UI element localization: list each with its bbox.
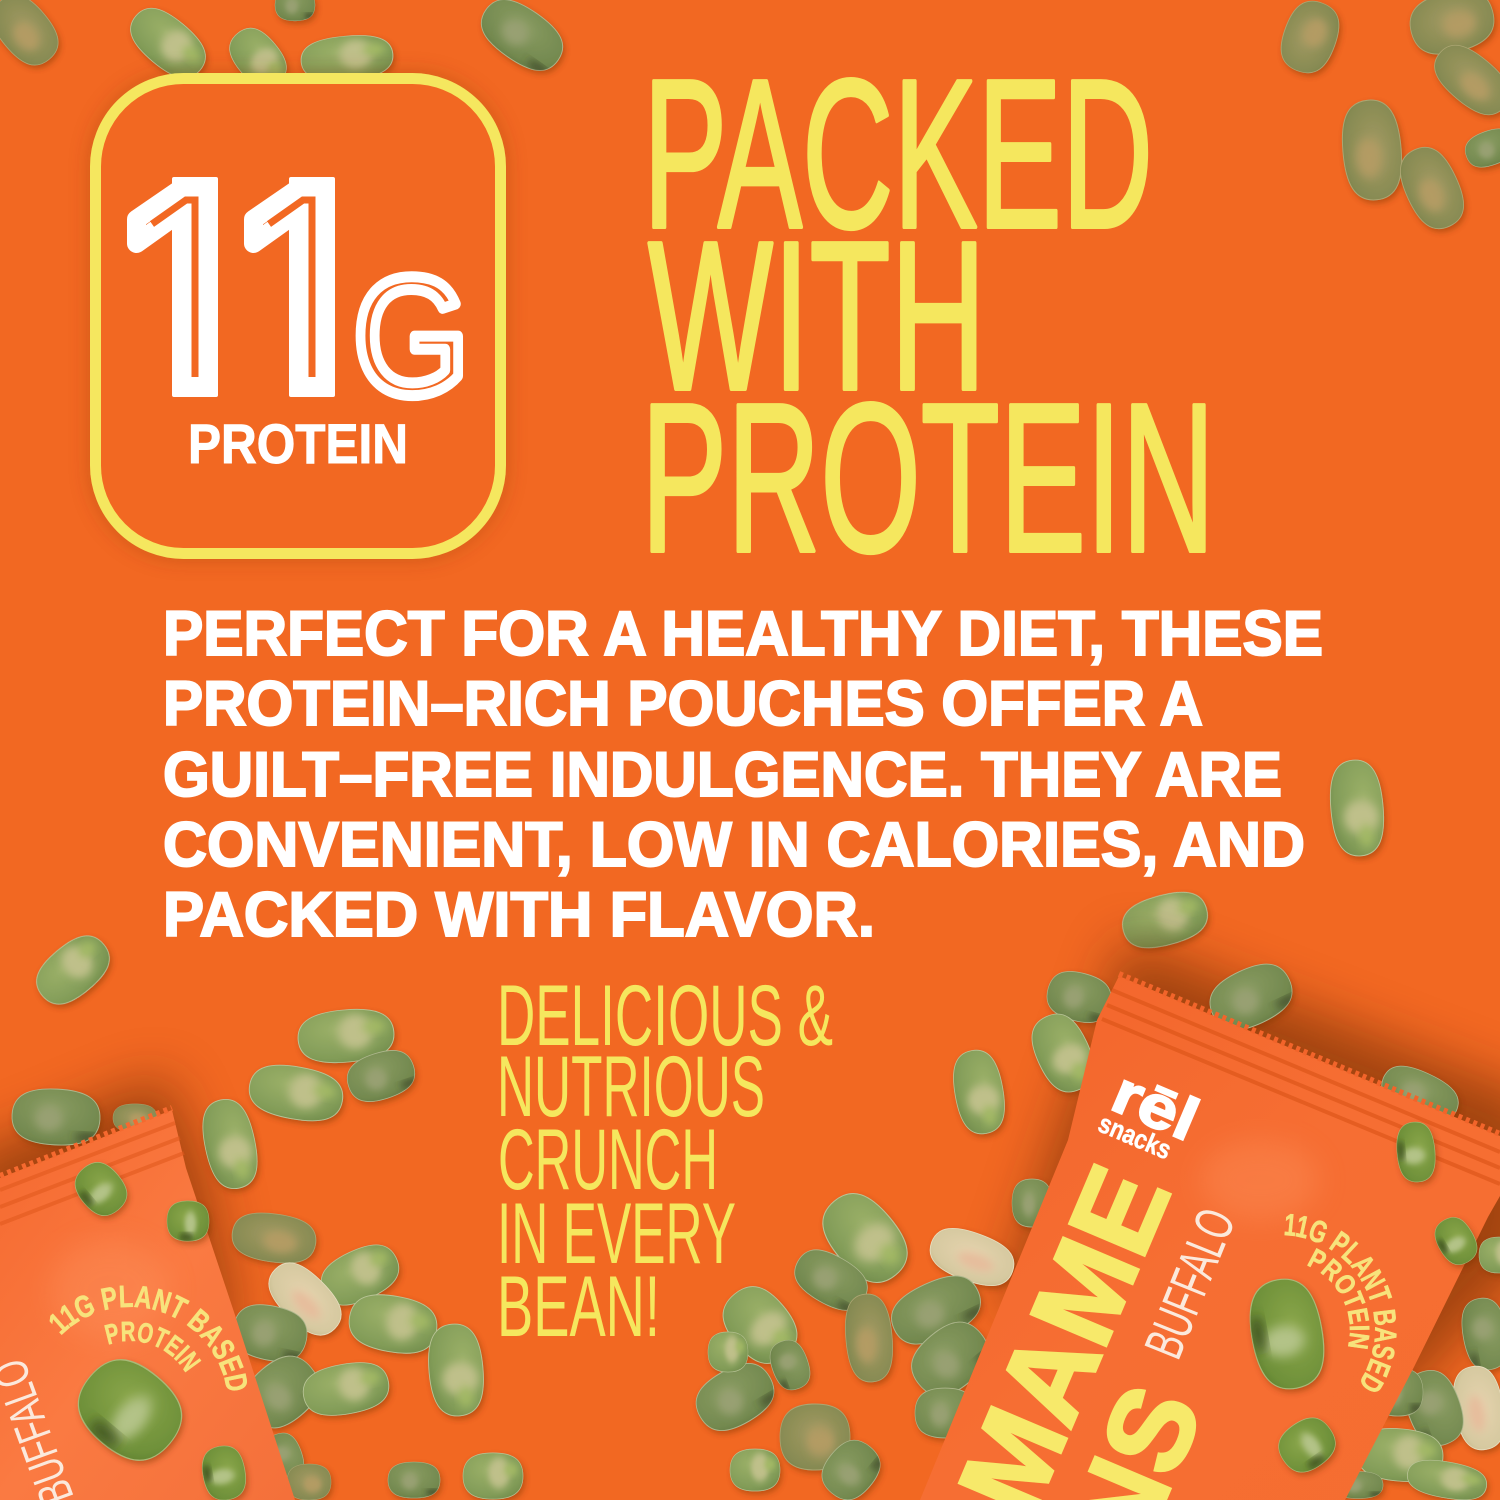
right snack pack xyxy=(920,971,1500,1500)
right pack highlight xyxy=(1205,1142,1314,1218)
scattered beans: behind packs and loose xyxy=(11,954,1500,1500)
badge figure 11 xyxy=(127,177,335,397)
tagline: CRUNCH xyxy=(498,1112,718,1208)
right pack logo: rēl xyxy=(1103,1058,1208,1154)
right pack arc label: PROTEIN xyxy=(1307,1248,1370,1350)
right pack logo: snacks xyxy=(1094,1108,1176,1165)
right pack flavor name: BUFFALO xyxy=(1133,1200,1247,1366)
left pack highlight xyxy=(58,1248,156,1329)
scattered beans: middle xyxy=(26,758,1387,1015)
tagline: BEAN! xyxy=(497,1259,660,1355)
tagline: DELICIOUS & xyxy=(497,968,833,1064)
beans resting on packs xyxy=(63,1120,1500,1500)
body text xyxy=(163,599,1323,950)
scattered beans: top xyxy=(0,0,1500,237)
badge figure 11: 1 xyxy=(226,124,387,449)
left pack arc label: 11G PLANT BASED xyxy=(50,1286,247,1391)
protein badge xyxy=(96,78,500,554)
body text: GUILT–FREE INDULGENCE. THEY ARE xyxy=(163,740,1282,810)
body text: PERFECT FOR A HEALTHY DIET, THESE xyxy=(163,599,1323,669)
right pack serrated edge xyxy=(1119,974,1500,1134)
pack shadows xyxy=(0,940,1500,1500)
tagline: NUTRIOUS xyxy=(497,1039,765,1135)
body text: PACKED WITH FLAVOR. xyxy=(163,880,875,950)
badge unit G: G xyxy=(353,242,469,430)
left pack serrated edge xyxy=(0,1108,172,1176)
right pack crimp ridges xyxy=(1102,990,1500,1184)
left snack pack xyxy=(0,1105,295,1500)
badge frame xyxy=(96,78,500,554)
body text: PROTEIN–RICH POUCHES OFFER A xyxy=(163,669,1203,739)
right pack arc label: 11G PLANT BASED xyxy=(1284,1214,1397,1392)
left pack arc label: PROTEIN xyxy=(104,1322,202,1372)
body text: CONVENIENT, LOW IN CALORIES, AND xyxy=(163,810,1305,880)
right pack logo xyxy=(1094,1058,1208,1170)
title: PACKED xyxy=(643,35,1153,272)
title: WITH xyxy=(648,197,986,434)
badge figure 11: 1 xyxy=(108,124,270,449)
tagline xyxy=(497,968,833,1355)
left pack crimp ridges xyxy=(0,1123,184,1224)
title xyxy=(641,35,1215,596)
tagline: IN EVERY xyxy=(497,1186,736,1282)
badge label: PROTEIN xyxy=(188,412,408,475)
